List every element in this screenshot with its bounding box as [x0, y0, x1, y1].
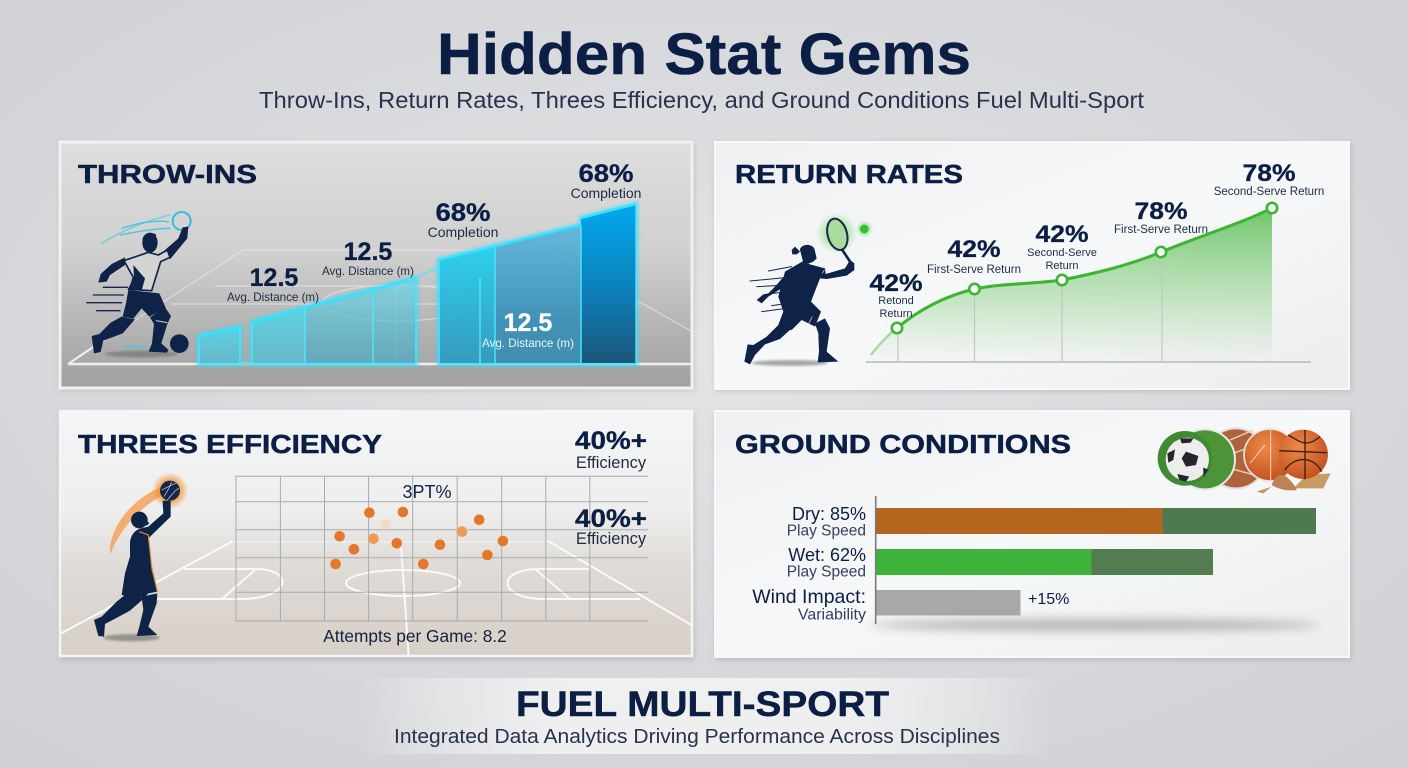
stat: 12.5 avg distance 1: 12.5 — [250, 264, 298, 292]
stat: 42% second-serve return: Return — [1045, 260, 1079, 272]
stat: 42% second-serve return: Second-Serve — [1027, 247, 1097, 259]
icon: tennis player — [744, 213, 873, 366]
panel: throw-ins — [60, 142, 700, 390]
chart: throw-in bars — [199, 204, 636, 364]
stat: 40%+ efficiency 1: 40%+ — [575, 427, 647, 455]
label: wet 62% play speed — [787, 545, 866, 580]
stat: 12.5 avg distance 1 — [227, 264, 319, 304]
label: wind impact variability — [752, 586, 866, 624]
stat: 78% second-serve return: Second-Serve Return — [1214, 186, 1324, 198]
label: wet 62% play speed: Wet: 62% — [788, 545, 866, 565]
heading: return rates: RETURN RATES — [735, 159, 963, 189]
chart: ground conditions bars — [870, 496, 1320, 631]
stat: 12.5 avg distance 3: 12.5 — [504, 309, 552, 337]
label: dry 85% play speed: Dry: 85% — [792, 504, 866, 524]
stat: 40%+ efficiency 2: Efficiency — [576, 530, 647, 548]
bar: wet 62% — [876, 549, 1213, 575]
label: dry 85% play speed — [787, 504, 866, 540]
stat: 68% completion 2: 68% — [578, 160, 634, 188]
stat: 68% completion 1: Completion — [428, 224, 498, 240]
stat: 42% retond return: 42% — [870, 270, 922, 297]
bar: dry 85% — [876, 508, 1316, 534]
stat: 42% retond return — [870, 270, 922, 320]
stat: 68% completion 1: 68% — [436, 199, 490, 227]
label: +15%: +15% — [1028, 591, 1069, 608]
stat: 12.5 avg distance 2 — [322, 238, 414, 278]
heading: threes efficiency: THREES EFFICIENCY — [78, 429, 382, 459]
label: wet 62% play speed: Play Speed — [787, 564, 866, 580]
stat: 68% completion 1 — [428, 199, 498, 240]
stat: 12.5 avg distance 3 — [482, 309, 574, 350]
stat: 78% first-serve return — [1114, 198, 1208, 236]
icon: sports balls and surfaces — [1158, 428, 1331, 493]
footer heading: FUEL MULTI-SPORT — [516, 685, 889, 724]
stat: 42% second-serve return: 42% — [1036, 221, 1088, 248]
stat: 12.5 avg distance 3: Avg. Distance (m) — [482, 337, 574, 350]
stat: 42% retond return: Return — [879, 308, 913, 320]
panel: threes efficiency — [60, 411, 700, 660]
panel: ground conditions — [715, 411, 1351, 660]
subtitle: Throw-Ins, Return Rates, Threes Efficiency, and Ground Conditions Fuel Multi-Sport — [259, 87, 1144, 113]
label: attempts per game: Attempts per Game: 8.2 — [323, 626, 507, 646]
stat: 42% first-serve return: 42% — [948, 236, 1000, 263]
footer band — [358, 678, 1052, 754]
bar: wind impact — [876, 590, 1020, 616]
label: dry 85% play speed: Play Speed — [787, 522, 866, 540]
stat: 78% second-serve return: 78% — [1242, 160, 1296, 187]
icon: soccer player throwing — [87, 212, 191, 357]
panel: return rates — [715, 142, 1351, 391]
stat: 78% second-serve return — [1214, 160, 1324, 198]
heading: ground conditions: GROUND CONDITIONS — [735, 429, 1071, 459]
stat: 40%+ efficiency 1 — [575, 427, 647, 472]
stat: 78% first-serve return: First-Serve Return — [1114, 224, 1208, 236]
stat: 12.5 avg distance 2: 12.5 — [344, 238, 392, 266]
stat: 40%+ efficiency 2 — [575, 505, 647, 548]
label: wind impact variability: Wind Impact: — [752, 586, 866, 608]
stat: 42% first-serve return — [927, 236, 1021, 276]
stat: 78% first-serve return: 78% — [1134, 198, 1188, 225]
chart: 3pt grid and scatter — [236, 476, 648, 621]
stat: 40%+ efficiency 1: Efficiency — [576, 454, 647, 472]
stat: 12.5 avg distance 1: Avg. Distance (m) — [227, 291, 319, 304]
stat: 42% retond return: Retond — [878, 295, 914, 307]
stat: 68% completion 2: Completion — [571, 185, 641, 201]
label: 3pt%: 3PT% — [402, 482, 452, 502]
title: Hidden Stat Gems — [437, 22, 971, 87]
footer subtitle: Integrated Data Analytics Driving Performance Across Disciplines — [394, 726, 1000, 748]
stat: 12.5 avg distance 2: Avg. Distance (m) — [322, 265, 414, 278]
stat: 42% second-serve return — [1027, 221, 1097, 272]
chart: return rate line — [866, 203, 1311, 362]
icon: basketball shooter — [94, 472, 188, 641]
heading: throw-ins: THROW-INS — [78, 159, 257, 189]
label: wind impact variability: Variability — [798, 606, 866, 624]
stat: 68% completion 2 — [571, 160, 641, 201]
stat: 40%+ efficiency 2: 40%+ — [575, 505, 647, 533]
stat: 42% first-serve return: First-Serve Return — [927, 264, 1021, 276]
